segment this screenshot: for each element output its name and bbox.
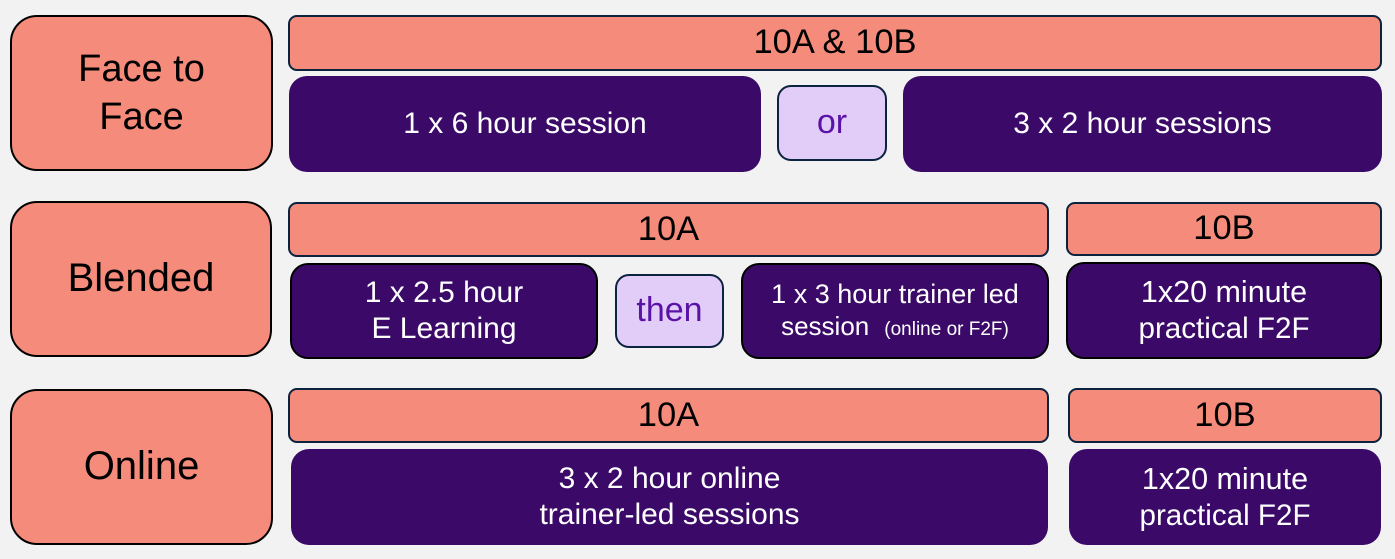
session: Blended 1x20 minute practical F2F: 1x20 minute [1141, 275, 1307, 309]
row label: Blended: Blended [68, 256, 214, 300]
session: 1 x 3 hour trainer led session: session (online or F2F) [781, 310, 1009, 340]
header: Online 10B [1068, 388, 1382, 443]
session: 3 x 2 hour online trainer-led sessions [291, 449, 1048, 545]
header: Blended 10A: 10A [638, 210, 699, 248]
session: Online 1x20 minute practical F2F [1069, 449, 1381, 545]
row label: Face to Face: Face [99, 96, 184, 138]
session: Online 1x20 minute practical F2F: practical F2F [1139, 498, 1311, 532]
session: Blended 1x20 minute practical F2F: practical F2F [1138, 312, 1310, 345]
row label: Face to Face [10, 15, 273, 171]
header: Blended 10B: 10B [1193, 208, 1255, 246]
session: 1 x 6 hour session [289, 76, 761, 172]
header: Blended 10B [1066, 202, 1382, 256]
session: 3 x 2 hour sessions: 3 x 2 hour sessions [1013, 107, 1272, 140]
connector: then: then [636, 291, 703, 329]
header: Online 10B: 10B [1194, 396, 1256, 434]
session: Online 1x20 minute practical F2F: 1x20 minute [1142, 462, 1308, 496]
session: 1 x 3 hour trainer led session: 1 x 3 hour trainer led [771, 278, 1019, 308]
session: 1 x 2.5 hour E Learning: 1 x 2.5 hour [365, 276, 523, 309]
row label: Online [10, 389, 273, 545]
header: Online 10A: 10A [638, 396, 699, 434]
header: 10A & 10B: 10A & 10B [753, 22, 917, 60]
session: 1 x 6 hour session: 1 x 6 hour session [403, 107, 647, 140]
session: 1 x 2.5 hour E Learning [290, 263, 598, 359]
connector: then [615, 274, 724, 348]
connector: or: or [817, 102, 847, 140]
row label: Face to Face: Face to [78, 48, 205, 90]
row label: Blended [10, 201, 272, 357]
header: Blended 10A [288, 202, 1049, 257]
session: 1 x 3 hour trainer led session [741, 263, 1049, 359]
session: 3 x 2 hour online trainer-led sessions: 3 x 2 hour online [559, 462, 780, 495]
header: 10A & 10B [288, 15, 1382, 71]
header: Online 10A [288, 388, 1049, 443]
session: 3 x 2 hour online trainer-led sessions: trainer-led sessions [539, 498, 800, 531]
row label: Online: Online [84, 444, 199, 488]
session: 1 x 2.5 hour E Learning: E Learning [371, 312, 517, 345]
connector: or [777, 85, 887, 161]
session: Blended 1x20 minute practical F2F [1066, 262, 1382, 359]
session: 3 x 2 hour sessions [903, 76, 1382, 172]
